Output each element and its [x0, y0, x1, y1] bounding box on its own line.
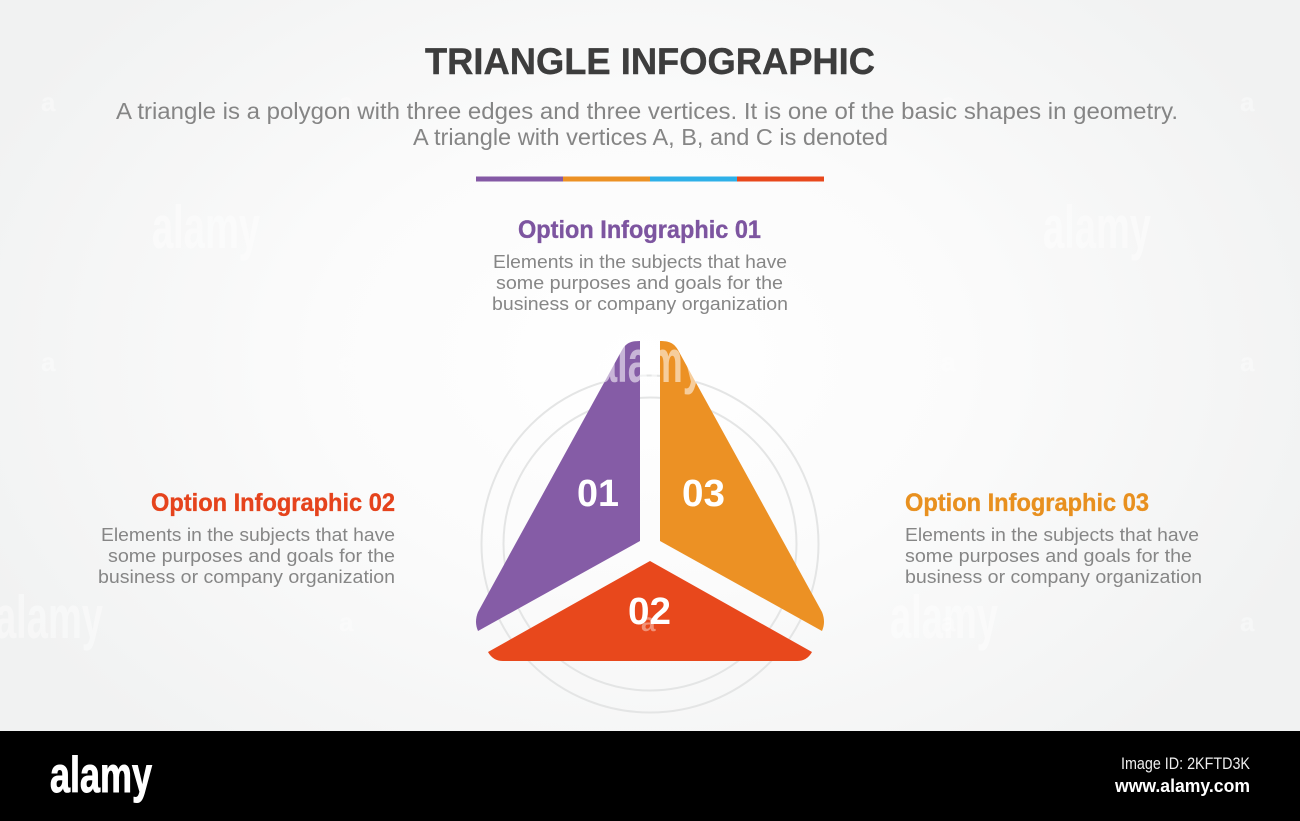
panel: option 01: [492, 216, 788, 314]
website: www.alamy.com: [1114, 776, 1250, 796]
segment 03: orange: [660, 341, 824, 631]
subtitle text block: A triangle with vertices A, B, and C is denoted: [413, 124, 888, 150]
text: option 02 description: business or company organization: [98, 567, 395, 587]
background watermarks: [0, 87, 1255, 651]
colour divider bar: [476, 176, 824, 182]
text: option 03 description: business or company organization: [905, 567, 1202, 587]
text: option 01 description: some purposes and goals for the: [496, 273, 783, 293]
text: option 01 description: business or company organization: [492, 294, 788, 314]
subtitle text block: [116, 98, 1178, 150]
background watermarks: a: [941, 347, 956, 377]
background watermarks: alamy: [1043, 194, 1151, 261]
background watermarks: a: [941, 87, 956, 117]
background watermarks: a: [41, 347, 56, 377]
heading: option 02: Option Infographic 02: [151, 489, 395, 517]
background watermarks: a: [41, 87, 56, 117]
text: option 03 description: some purposes and goals for the: [905, 546, 1192, 566]
background watermarks: alamy: [0, 584, 103, 651]
background watermarks: a: [339, 87, 354, 117]
title: TRIANGLE INFOGRAPHIC: [425, 41, 875, 82]
background watermarks: a: [1240, 87, 1255, 117]
panel: option 02: [98, 489, 395, 587]
panel: option 03: [905, 489, 1202, 587]
heading: option 03: Option Infographic 03: [905, 489, 1149, 517]
segment 02: red: 02: [628, 591, 671, 633]
segment 02: red: a: [641, 607, 656, 637]
text: option 03 description: Elements in the subjects that have: [905, 525, 1199, 545]
image id: Image ID: 2KFTD3K: [1121, 754, 1251, 773]
text: option 02 description: Elements in the subjects that have: [101, 525, 395, 545]
text: option 03 description: [905, 525, 1202, 587]
text: option 02 description: some purposes and goals for the: [108, 546, 395, 566]
background watermarks: a: [941, 607, 956, 637]
segment 03: orange: 03: [682, 473, 725, 515]
watermark over triangle top: alamy: [596, 328, 704, 395]
background watermarks: alamy: [890, 584, 998, 651]
footer bar: [0, 731, 1300, 821]
text: option 01 description: [492, 252, 788, 314]
segment 01: purple: [476, 341, 640, 631]
concentric circles behind triangle: [482, 376, 818, 712]
background watermarks: a: [339, 607, 354, 637]
footer logo: alamy: [50, 747, 152, 803]
segment 01: purple: 01: [577, 473, 619, 515]
background watermarks: a: [1240, 347, 1255, 377]
background watermarks: a: [1240, 607, 1255, 637]
background watermarks: a: [339, 347, 354, 377]
text: option 01 description: Elements in the subjects that have: [493, 252, 787, 272]
text: option 02 description: [98, 525, 395, 587]
segment 02: red: [488, 561, 812, 661]
heading: option 01: Option Infographic 01: [518, 216, 761, 244]
triangle chart: [476, 341, 824, 661]
subtitle text block: A triangle is a polygon with three edges and three vertices. It is one of the basic shapes in geometry.: [116, 98, 1178, 124]
background watermarks: alamy: [152, 194, 260, 261]
